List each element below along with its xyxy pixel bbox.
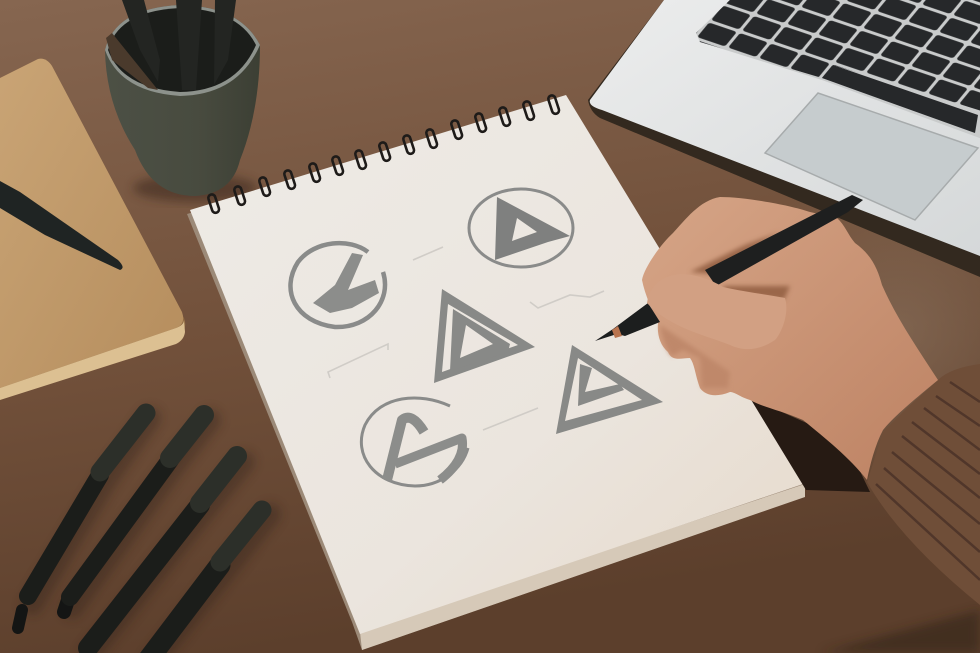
hand with pen	[595, 195, 938, 480]
marker 2	[64, 415, 204, 612]
sketch: circle with V mark	[290, 243, 385, 327]
tan notebook	[0, 59, 185, 400]
curled fingers	[660, 325, 730, 388]
marker 4	[148, 510, 262, 653]
sketch: circle with triangle	[469, 189, 573, 267]
black markers	[18, 413, 270, 653]
laptop	[588, 0, 980, 277]
sweater sleeve	[867, 364, 980, 605]
marker 3	[88, 456, 237, 648]
spiral binding	[207, 95, 560, 214]
pen	[595, 303, 660, 341]
pen cup	[105, 0, 260, 202]
trackpad	[765, 93, 978, 220]
sketch: right triangle	[556, 345, 663, 434]
spiral notepad	[187, 95, 805, 650]
sketch: lower circle	[361, 398, 468, 486]
keyboard	[696, 0, 980, 140]
sketch: centre triangle	[434, 289, 535, 383]
shadow under index finger	[690, 232, 790, 300]
marker shadows	[32, 418, 270, 653]
faint pencil marks	[328, 247, 604, 430]
bottom right desk shadow	[820, 610, 980, 653]
thumb over pen	[647, 274, 786, 349]
pen on notebook	[0, 181, 123, 270]
marker 1	[18, 413, 146, 628]
hand shadow	[750, 398, 870, 492]
pens in cup	[122, 0, 236, 90]
